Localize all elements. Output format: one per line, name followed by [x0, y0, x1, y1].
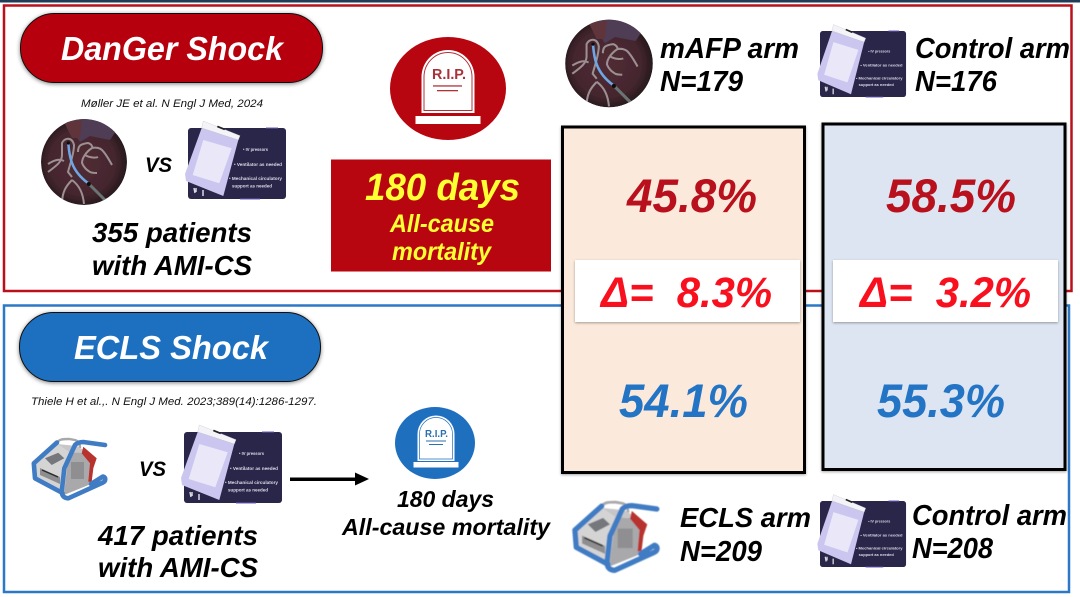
label: Control arm N=176: N=176: [915, 66, 998, 98]
value: DanGer control mortality: 58.5%: [886, 169, 1016, 222]
label: Control arm N=176: [915, 33, 1070, 98]
icon: red R.I.P. tombstone: [390, 37, 506, 140]
callout: 180 days all-cause mortality: 180 days: [365, 167, 520, 209]
box: mAFP delta: Δ= 8.3%: [599, 269, 772, 317]
label: ECLS arm N=209: N=209: [680, 536, 762, 568]
citation: ECLS Shock: Thiele H et al.,. N Engl J Med. 2023;389(14):1286-1297.: [31, 396, 317, 408]
callout: 180 days all-cause mortality: All-cause: [389, 210, 494, 238]
icon: IV bag control arm top: • IV pressors: [868, 49, 890, 53]
label: Control arm N=176: Control arm: [915, 33, 1070, 65]
label: Control arm N=208: Control arm: [912, 500, 1067, 532]
heading: ECLS Shock pill: ECLS Shock: [74, 329, 270, 366]
icon: IV bag control card: • Ventilator as needed: [234, 162, 282, 167]
text: 355 patients with AMI-CS: with AMI-CS: [92, 250, 252, 281]
box: control delta: [833, 260, 1058, 322]
icon: IV bag control card: • Mechanical circulatory: [225, 480, 279, 485]
icon: ECLS console arm: [575, 502, 657, 570]
value: DanGer mAFP mortality: 45.8%: [626, 169, 757, 222]
icon: IV bag control card: [181, 425, 282, 503]
icon: IV bag control arm bottom: • Ventilator as needed: [860, 533, 903, 537]
icon: IV bag control card: • Ventilator as needed: [230, 466, 278, 471]
arrow: to outcome: [290, 472, 369, 486]
text: 355 patients with AMI-CS: 355 patients: [92, 217, 252, 248]
label: mAFP arm N=179: mAFP arm: [660, 33, 799, 65]
icon: blue R.I.P. tombstone: [395, 407, 475, 479]
icon: IV bag control card: support as needed: [232, 183, 272, 188]
value: ECLS control mortality: 55.3%: [877, 374, 1005, 427]
text: 180 days all-cause mortality: [341, 486, 551, 540]
icon: IV bag control card: • IV pressors: [239, 451, 265, 456]
icon: IV bag control card: [185, 121, 286, 199]
icon: ECLS console: [34, 439, 105, 498]
label: Control arm N=208: [912, 500, 1067, 565]
heading: DanGer Shock pill: DanGer Shock: [61, 30, 285, 67]
label: VS: VS: [139, 458, 166, 481]
panel: DanGer Shock frame: [4, 6, 1072, 291]
heading: DanGer Shock pill: [20, 14, 322, 82]
icon: IV bag control arm bottom: • IV pressors: [868, 519, 890, 523]
citation: DanGer Shock: Møller JE et al. N Engl J Med, 2024: [81, 98, 263, 110]
label: mAFP arm N=179: [660, 33, 799, 98]
box: control delta: Δ= 3.2%: [858, 269, 1031, 317]
icon: heart pump: [41, 114, 127, 205]
icon: IV bag control arm top: [817, 24, 906, 97]
icon: red R.I.P. tombstone: R.I.P.: [432, 66, 466, 83]
text: 417 patients with AMI-CS: 417 patients: [97, 520, 258, 551]
icon: IV bag control arm bottom: support as needed: [859, 553, 894, 557]
text: 180 days all-cause mortality: 180 days: [397, 486, 494, 512]
callout: 180 days all-cause mortality: [331, 160, 551, 272]
panel: mAFP / ECLS arm results: [562, 127, 804, 472]
panel: control arm results: [823, 124, 1065, 470]
text: 417 patients with AMI-CS: with AMI-CS: [98, 552, 258, 583]
icon: IV bag control arm top: support as needed: [859, 83, 894, 87]
icon: IV bag control arm bottom: [817, 494, 906, 567]
text: 355 patients with AMI-CS: [92, 217, 252, 281]
text: 417 patients with AMI-CS: [97, 520, 258, 583]
icon: IV bag control arm bottom: • Mechanical circulatory: [856, 546, 903, 550]
icon: heart pump mAFP arm: [565, 15, 653, 107]
panel: ECLS Shock frame: [4, 306, 1069, 592]
label: ECLS arm N=209: ECLS arm: [680, 502, 811, 533]
text: 180 days all-cause mortality: All-cause mortality: [341, 514, 551, 540]
icon: IV bag control card: • Mechanical circulatory: [229, 176, 283, 181]
icon: IV bag control arm top: • Mechanical circulatory: [856, 76, 903, 80]
heading: ECLS Shock pill: [20, 312, 320, 382]
callout: 180 days all-cause mortality: mortality: [392, 238, 492, 266]
box: mAFP delta: [575, 260, 800, 322]
label: Control arm N=208: N=208: [912, 533, 994, 565]
value: ECLS arm mortality: 54.1%: [619, 374, 748, 427]
icon: IV bag control arm top: • Ventilator as needed: [860, 63, 903, 67]
icon: IV bag control card: • IV pressors: [243, 147, 269, 152]
label: ECLS arm N=209: [680, 502, 811, 568]
icon: IV bag control card: support as needed: [228, 487, 268, 492]
icon: blue R.I.P. tombstone: R.I.P.: [425, 429, 448, 440]
label: VS: VS: [145, 154, 172, 177]
label: mAFP arm N=179: N=179: [660, 66, 743, 98]
